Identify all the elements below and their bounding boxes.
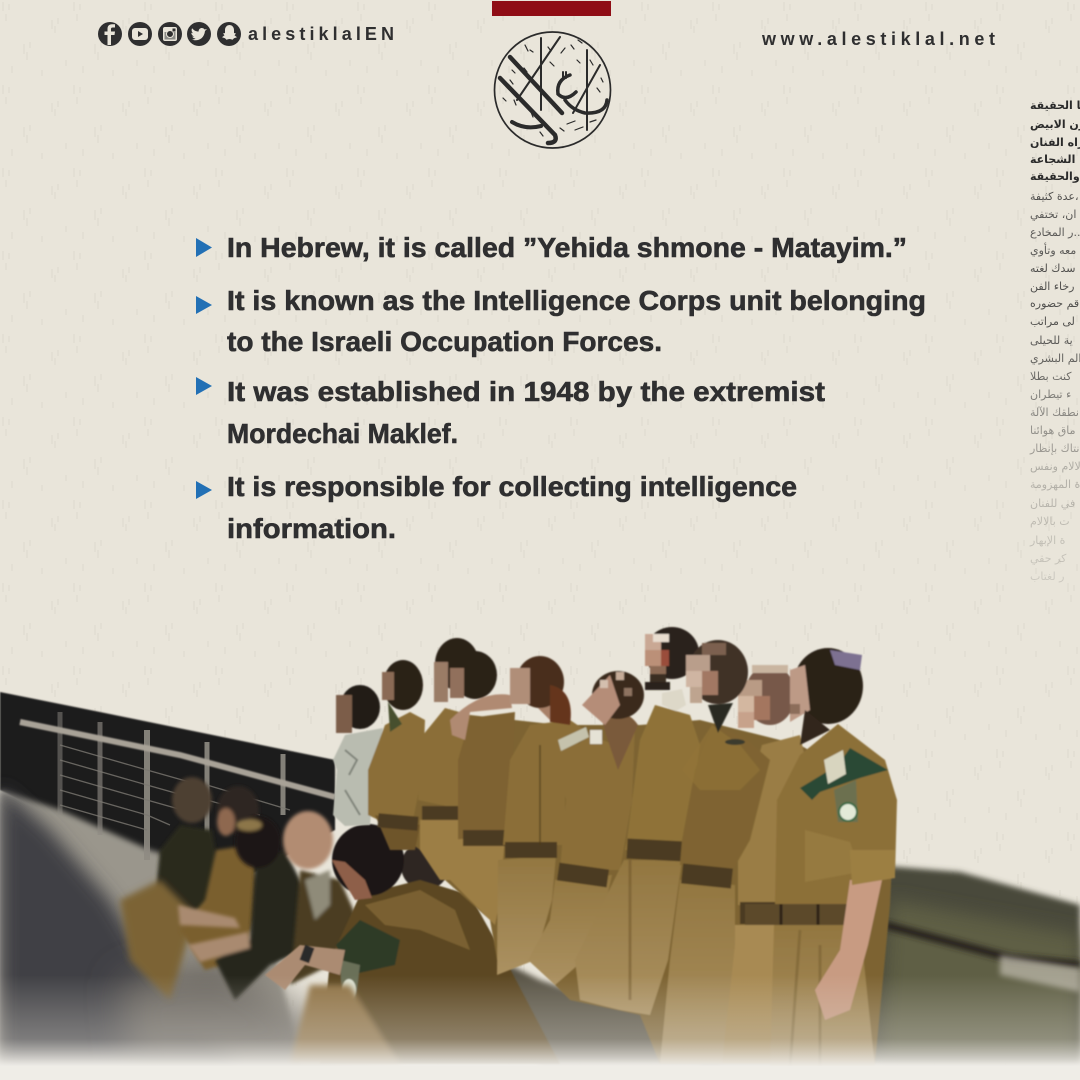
arabic newspaper column: لى مراتب bbox=[1030, 315, 1075, 328]
bullet 1: In Hebrew, it is called ”Yehida shmone - Matayim.” bbox=[227, 232, 907, 263]
arabic newspaper column: ة المهزومة bbox=[1030, 478, 1080, 491]
arabic newspaper column: سدك لغته bbox=[1030, 262, 1075, 275]
soldier 4 bbox=[450, 651, 515, 925]
arabic newspaper column: كنت بطلا bbox=[1030, 370, 1072, 383]
bullet list bbox=[196, 232, 926, 544]
icon: twitter bbox=[187, 22, 211, 46]
website: www.alestiklal.net bbox=[761, 29, 995, 49]
arabic newspaper column: نطقك الآلة bbox=[1030, 406, 1079, 419]
standing soldiers bbox=[333, 627, 897, 1068]
bullet 4 bbox=[196, 471, 797, 544]
arabic newspaper column bbox=[1029, 99, 1080, 583]
shadowed ground under standing soldiers bbox=[500, 960, 720, 1064]
soldier 9 bbox=[710, 665, 810, 1064]
soldier 6: woman bbox=[528, 671, 644, 985]
body mass behind soldiers bbox=[375, 715, 895, 1064]
icon: snapchat bbox=[217, 22, 241, 46]
seated soldier 3 with kippah bbox=[178, 816, 310, 1000]
bullet 3: It was established in 1948 by the extremist bbox=[227, 376, 825, 407]
soldier 10: front, with green epaulette bbox=[745, 648, 897, 1068]
bullet 2: to the Israeli Occupation Forces. bbox=[227, 326, 662, 357]
icon: youtube bbox=[128, 22, 152, 46]
arabic newspaper column: ء تيطران bbox=[1030, 388, 1071, 401]
bullet 3 bbox=[196, 376, 825, 449]
seated soldier 4 bbox=[283, 811, 358, 985]
arabic newspaper column: ماق هوائنا bbox=[1030, 424, 1076, 437]
seated soldier 2 bbox=[180, 786, 262, 970]
arabic newspaper column: رخاء الفن bbox=[1030, 280, 1074, 293]
soldier 7 bbox=[575, 627, 700, 1015]
icon: instagram bbox=[158, 22, 182, 46]
arabic newspaper column: الشجاعة bbox=[1030, 153, 1075, 166]
arabic newspaper column: نتاك بإنظار bbox=[1029, 442, 1079, 455]
logo: calligraphic roundel bbox=[494, 32, 610, 148]
bullet 4: information. bbox=[227, 513, 396, 544]
social handle: alestiklalEN bbox=[248, 24, 394, 44]
arabic newspaper column: كر حقي bbox=[1030, 552, 1067, 565]
soldier 3 bbox=[418, 638, 479, 880]
arabic newspaper column: ر لغتاب bbox=[1030, 570, 1064, 583]
arabic newspaper column: ان، تختفي bbox=[1030, 208, 1076, 221]
bridge railing and deck bbox=[0, 692, 380, 1064]
social icons bbox=[98, 22, 241, 46]
seated soldiers bbox=[120, 777, 560, 1064]
arabic newspaper column: الم البشري bbox=[1030, 352, 1080, 365]
arabic newspaper column: في للفنان bbox=[1030, 497, 1075, 510]
bullet 2 bbox=[196, 285, 926, 357]
bottom fade into paper bbox=[0, 975, 1080, 1066]
arabic newspaper column: ية للحيلى bbox=[1030, 334, 1073, 347]
arabic newspaper column: معه وتأوي bbox=[1030, 242, 1076, 257]
arabic newspaper column: قم حضوره bbox=[1030, 297, 1079, 310]
arabic newspaper column: ة الإبهار bbox=[1029, 534, 1065, 547]
bullet 2: It is known as the Intelligence Corps unit belonging bbox=[227, 285, 926, 316]
photo: soldiers on a bridge bbox=[0, 627, 1080, 1080]
bullet 4: It is responsible for collecting intelligence bbox=[227, 471, 797, 502]
seated soldier 1 bbox=[120, 777, 222, 1000]
soldier 8 bbox=[660, 640, 770, 1064]
bottom edge strip bbox=[0, 1066, 1080, 1080]
red bar bbox=[492, 1, 611, 16]
icon: facebook bbox=[98, 22, 122, 46]
arabic newspaper column: ت بالالام bbox=[1030, 515, 1070, 528]
blurred right landscape bbox=[700, 866, 1080, 1064]
seated soldier 5 foreground bbox=[265, 824, 560, 1064]
soldier 5: woman bbox=[497, 656, 585, 975]
soldier 2 bbox=[368, 660, 425, 850]
bullet 3: Mordechai Maklef. bbox=[227, 418, 458, 449]
arabic newspaper column: ر المخادع.. bbox=[1030, 226, 1080, 239]
soldier 1: grey shirt bbox=[333, 685, 383, 826]
arabic newspaper column: عدة كثيفة، bbox=[1030, 190, 1078, 203]
